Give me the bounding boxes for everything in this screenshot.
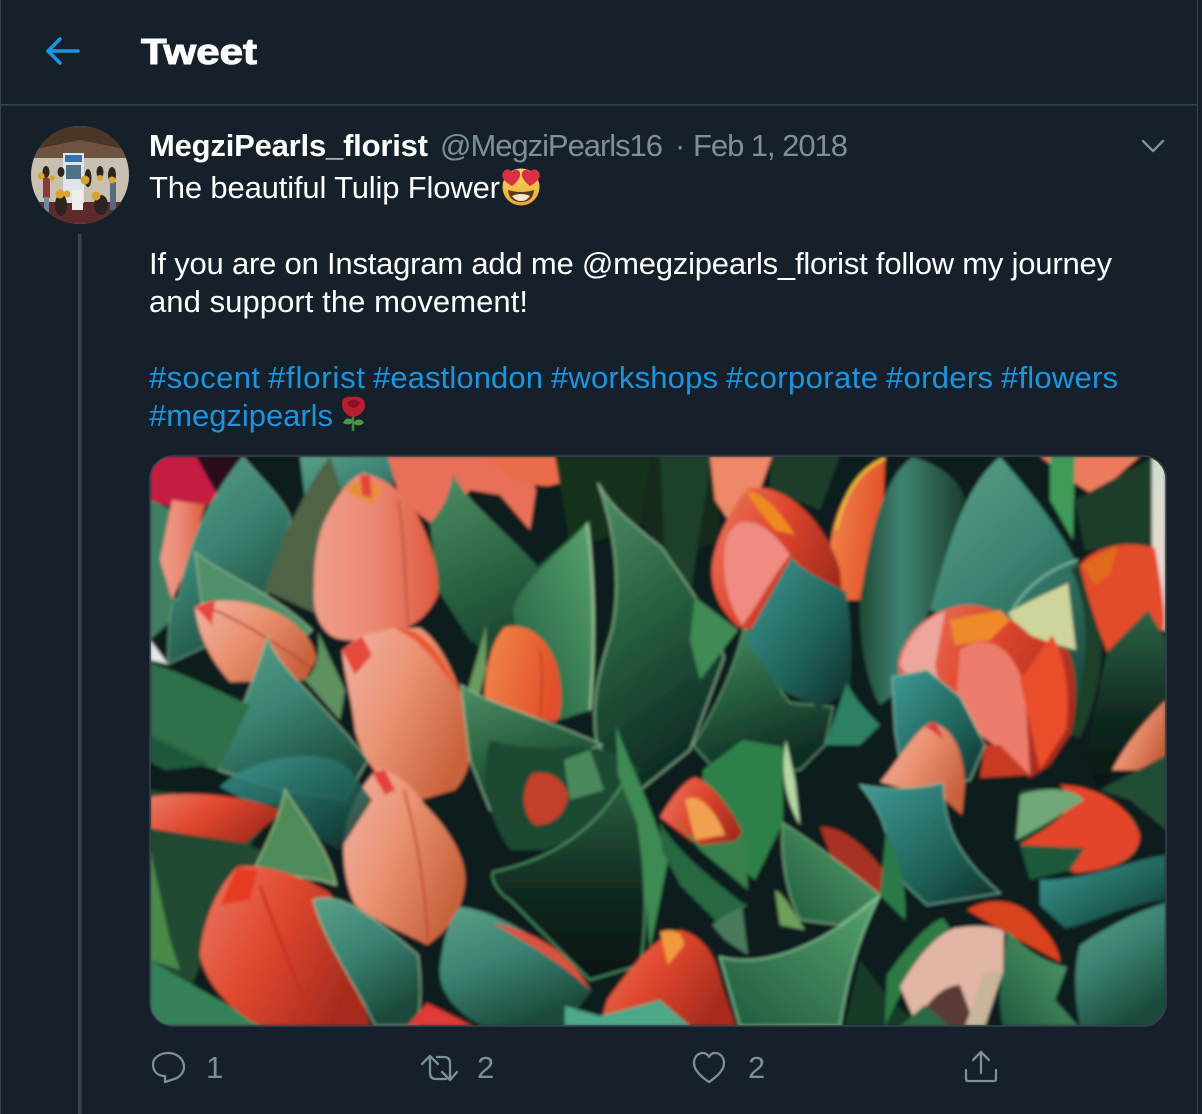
small tulip with green leaves centre-right: [660, 740, 800, 955]
large dark leaf centre: [492, 725, 668, 980]
tweet author line: Feb 1, 2018: [693, 128, 848, 163]
teal leaf in front of bloom: [892, 670, 985, 790]
tweet text: If you are on Instagram add me @megzipearls_florist follow my journey: [149, 246, 1112, 281]
photo background: [150, 456, 1166, 1026]
hashtags: #workshops: [551, 360, 718, 395]
hashtags: [149, 360, 1118, 433]
teal folded leaf: [860, 783, 1000, 905]
tulip: large right bloom: [898, 583, 1076, 778]
tulip: orange small: [484, 626, 561, 722]
small red tulip in dark leaf: [485, 740, 640, 850]
tweet author line: ·: [675, 128, 685, 163]
tulip: pale mid right: [880, 722, 1030, 815]
small leaf tip: [825, 683, 880, 745]
tulip: pale tall: [344, 768, 465, 945]
hashtags: #megzipearls: [149, 398, 333, 433]
top row back blooms: [150, 456, 1166, 632]
icon: retweet arrows: [422, 1056, 457, 1080]
photo rounded border: [150, 456, 1166, 1026]
green leaves mid left: [150, 625, 605, 815]
teal long leaf and bottom right leaf: [1040, 855, 1166, 1026]
action: reply: [153, 1050, 223, 1085]
leaf beside tall tulip: [264, 456, 345, 620]
tulip: big red lower left: [200, 866, 370, 1026]
title: Tweet: [141, 31, 257, 72]
icon: back arrow: [48, 39, 78, 63]
action: like: 2: [748, 1050, 765, 1085]
header: back arrow and title: [48, 31, 257, 72]
lower left leaves: [150, 756, 372, 1026]
thread connector line: [78, 234, 82, 1114]
action: retweet: 2: [477, 1050, 494, 1085]
tulip: pale lower right: [885, 901, 1078, 1026]
tulip: large salmon top: [314, 473, 438, 640]
tulip: top middle with teal leaf: [712, 458, 885, 708]
icon: heart: [694, 1053, 724, 1082]
horizontal red tulip right: [1016, 785, 1140, 880]
action: retweet: [422, 1050, 494, 1085]
icon: caret menu: [1143, 141, 1163, 151]
tweet text: [149, 168, 1112, 319]
left side leaves and small tulip: [150, 457, 312, 664]
small leaf tips: [900, 1005, 950, 1026]
tweet text: and support the movement!: [149, 284, 528, 319]
big green folded leaf lower right: [720, 895, 880, 1026]
icon: heart eyes emoji: [502, 168, 540, 206]
action: like: [694, 1050, 765, 1085]
hashtags: #orders: [886, 360, 993, 395]
icon: rose emoji: [342, 397, 365, 431]
far right tulips and leaves: [1080, 544, 1166, 830]
hashtags: #flowers: [1001, 360, 1118, 395]
dim red tulip in leaf: [775, 823, 905, 930]
avatar photo: [31, 126, 129, 224]
tulip: lower centre orange pink: [565, 930, 736, 1026]
hashtags: #socent: [149, 360, 260, 395]
hashtags: #eastlondon: [373, 360, 543, 395]
tweet text: The beautiful Tulip Flower: [149, 170, 500, 205]
action: reply: 1: [206, 1050, 223, 1085]
centre tall leaves right: [860, 457, 1095, 740]
tweet author line: MegziPearls_florist: [149, 128, 428, 163]
dark green leaves, top centre: [430, 473, 738, 790]
tulip: salmon centre left: [342, 628, 472, 800]
horizontal tulip left: [195, 600, 316, 682]
leaf tip centre: [693, 623, 833, 775]
teal leaf below centre: [313, 898, 592, 1026]
hashtags: #florist: [268, 360, 365, 395]
tweet author line: @MegziPearls16: [440, 128, 663, 163]
action: share icon: [966, 1052, 996, 1081]
tweet photo: tulips: [150, 456, 1166, 1026]
icon: reply bubble: [153, 1053, 184, 1082]
hashtags: #corporate: [726, 360, 878, 395]
tweet author line: [149, 128, 848, 163]
